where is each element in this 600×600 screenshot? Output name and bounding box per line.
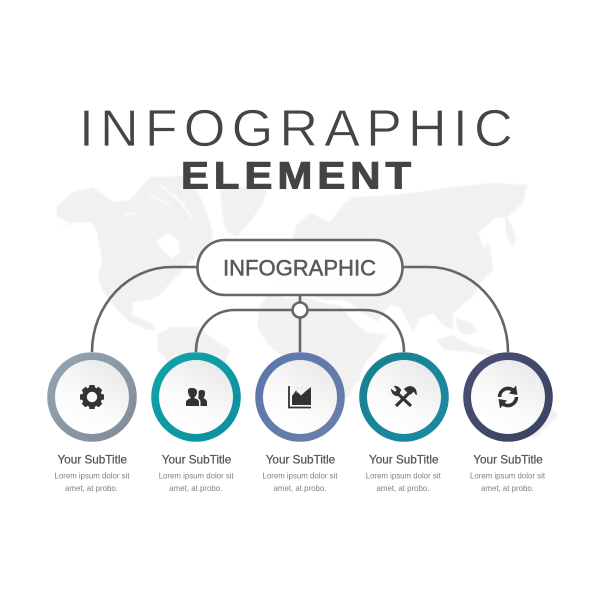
step 2 <box>151 352 241 493</box>
junction node <box>292 302 308 318</box>
step 2 description: Lorem ipsum dolor sit <box>159 470 234 480</box>
title line: INFOGRAPHIC: INFOGRAPHIC <box>79 100 519 158</box>
step 2 subtitle: Your SubTitle <box>162 452 232 466</box>
step 1 subtitle: Your SubTitle <box>58 452 127 466</box>
ring 4 <box>359 352 449 442</box>
step 4 <box>359 352 449 493</box>
ring 3 <box>255 352 345 442</box>
step 1 <box>47 352 137 493</box>
step 4 description: amet, at probo. <box>376 483 430 493</box>
icon: area chart <box>289 386 311 408</box>
step 1 description: amet, at probo. <box>65 483 118 493</box>
step 5 description: Lorem ipsum dolor sit <box>470 470 546 480</box>
step 1 description: Lorem ipsum dolor sit <box>54 470 130 480</box>
map cut-outs: inland seas and bays <box>125 185 495 318</box>
step 3 description <box>262 470 338 493</box>
title line: ELEMENT: ELEMENT <box>181 155 416 197</box>
step 3 <box>255 352 345 493</box>
step 5 <box>463 352 553 493</box>
step 5 subtitle: Your SubTitle <box>473 452 543 466</box>
step 2 description: amet, at probo. <box>169 483 222 493</box>
step 5 description <box>470 470 546 493</box>
step 4 description <box>366 470 441 493</box>
ring 1 <box>47 352 137 442</box>
step 3 subtitle: Your SubTitle <box>266 452 336 466</box>
icon: gear <box>75 380 109 414</box>
ring 5 <box>463 352 553 442</box>
ring 2 <box>151 352 241 442</box>
step 2 description <box>159 470 234 493</box>
step 5 description: amet, at probo. <box>481 483 534 493</box>
step 4 description: Lorem ipsum dolor sit <box>366 470 441 480</box>
pill label: INFOGRAPHIC <box>223 256 376 280</box>
icon: crossed tools <box>391 386 417 406</box>
step 1 description <box>54 470 130 493</box>
connector lines <box>92 267 508 352</box>
central label pill <box>198 240 402 295</box>
icon: people <box>186 388 207 406</box>
step 3 description: Lorem ipsum dolor sit <box>262 470 338 480</box>
step 3 description: amet, at probo. <box>274 483 326 493</box>
icon: refresh arrows <box>498 386 518 408</box>
step 4 subtitle: Your SubTitle <box>369 452 439 466</box>
world map background <box>40 176 558 438</box>
title <box>79 100 519 197</box>
